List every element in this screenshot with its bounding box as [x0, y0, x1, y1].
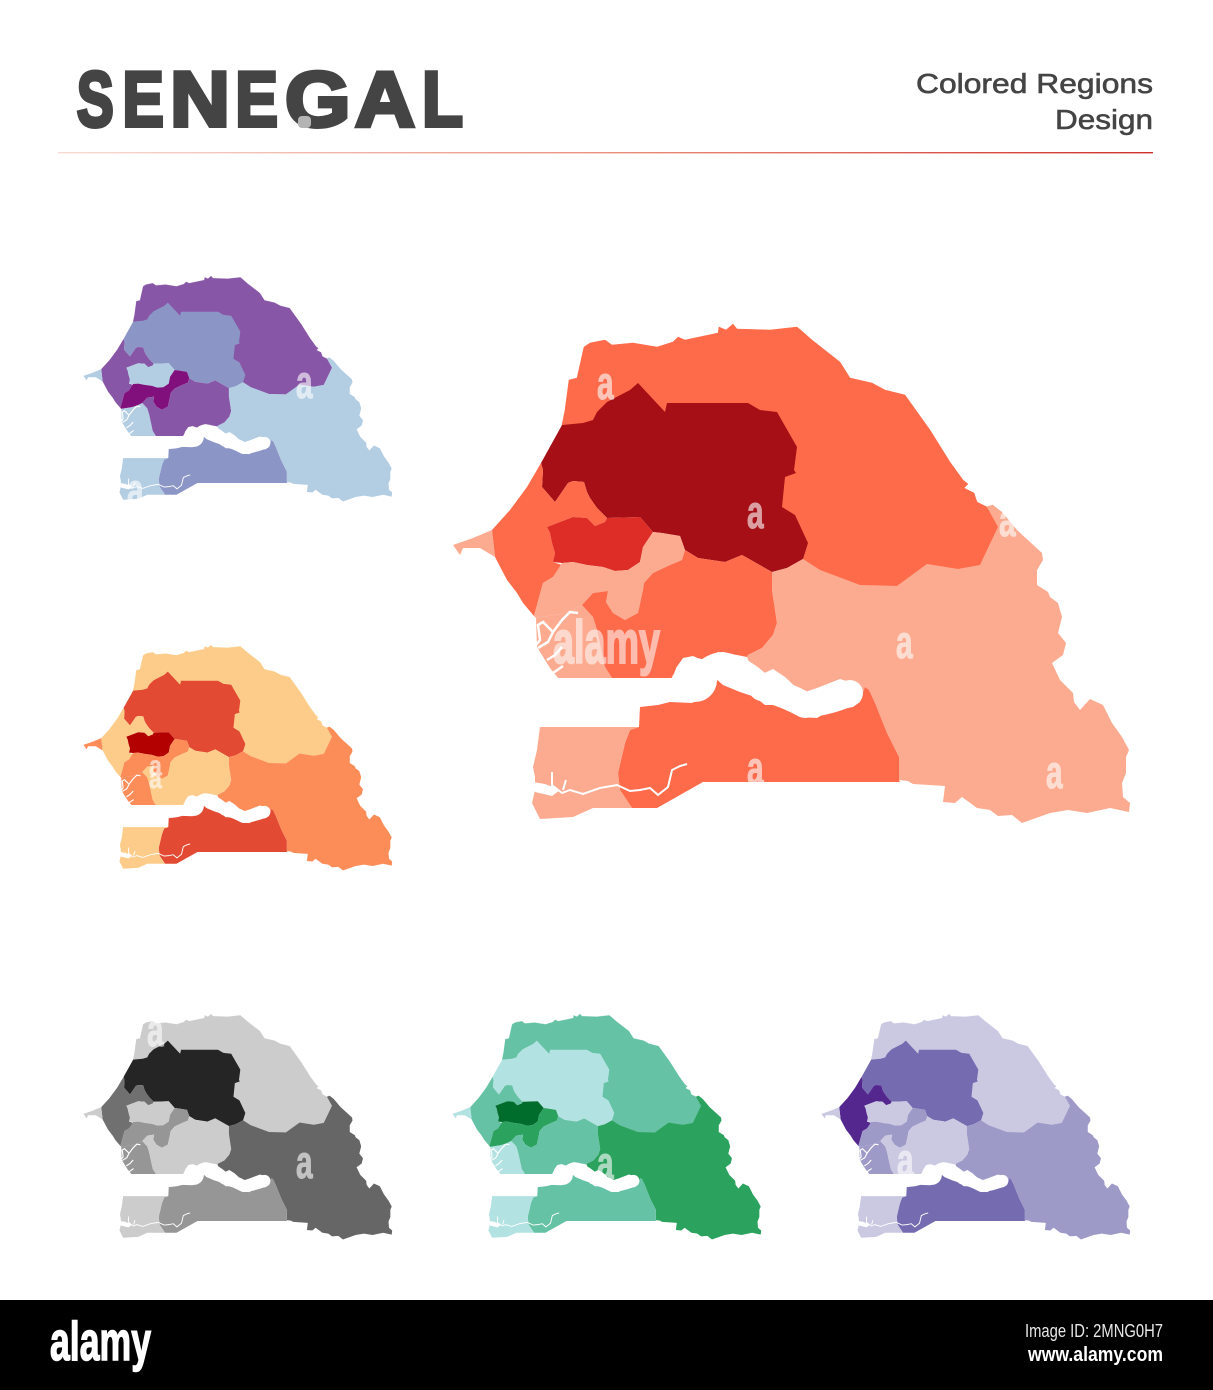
map: blue-purple version	[83, 276, 392, 502]
region: Kolda	[897, 1174, 1025, 1233]
region: Thies	[101, 1077, 154, 1146]
region: Kolda	[618, 678, 900, 808]
region: Fatick south	[121, 772, 156, 805]
region: Diourbel	[126, 363, 175, 388]
region: Fatick north	[120, 739, 189, 779]
region: Tambacounda	[218, 727, 392, 871]
watermark marks: a	[296, 1138, 313, 1189]
watermark marks: a	[1046, 748, 1063, 799]
rivers	[533, 612, 850, 796]
region: Fatick north	[534, 532, 685, 620]
region: Ziguinchor	[857, 1196, 906, 1238]
map: purple version	[821, 1014, 1130, 1240]
subtitle: Colored Regions	[916, 68, 1153, 99]
region: Louga	[124, 1041, 245, 1126]
region: Tambacounda	[218, 1096, 392, 1240]
region: Dakar	[83, 369, 103, 381]
region: Dakar	[821, 1107, 841, 1119]
watermark marks: a	[147, 1006, 164, 1057]
region: Louga	[541, 383, 808, 572]
region: Kolda	[159, 1174, 287, 1233]
region: Fatick north	[858, 1108, 927, 1148]
subtitle	[916, 68, 1153, 135]
title: G	[285, 55, 350, 143]
watermark marks: a	[897, 1136, 914, 1187]
footer image id: Image ID: 2MNG0H7	[1025, 1321, 1163, 1341]
watermark marks: a	[127, 466, 144, 517]
region: Kolda	[159, 436, 287, 495]
region: Kaolack	[142, 1116, 231, 1174]
region: north band	[133, 645, 332, 763]
region: Thies	[492, 463, 607, 616]
region: Thies	[470, 1077, 523, 1146]
region: Louga	[493, 1041, 614, 1126]
watermark marks: a	[296, 358, 313, 409]
map: grayscale version	[83, 1014, 392, 1240]
rivers	[120, 406, 264, 489]
watermark marks: a	[747, 744, 764, 795]
region: Fatick south	[859, 1141, 894, 1174]
region: Fatick south	[490, 1141, 525, 1174]
region: north band	[562, 324, 998, 586]
rivers	[120, 775, 264, 858]
region: Tambacounda	[587, 1096, 761, 1240]
region: Diourbel	[126, 732, 175, 757]
watermark: alamy wordmark: alamy	[553, 609, 660, 676]
region: Fatick north	[120, 1108, 189, 1148]
region: Fatick south	[121, 403, 156, 436]
region: Tambacounda	[218, 358, 392, 502]
watermark marks	[127, 358, 1063, 1190]
region: north band	[871, 1014, 1070, 1132]
region: Tambacounda	[956, 1096, 1130, 1240]
title: S	[77, 55, 114, 143]
region: Kaolack	[142, 378, 231, 436]
region: Fatick south	[121, 1141, 156, 1174]
footer logo: alamy	[50, 1310, 151, 1372]
title	[77, 55, 463, 143]
region: Ziguinchor	[119, 827, 168, 869]
rivers	[858, 1144, 1002, 1227]
region: Ziguinchor	[532, 727, 639, 819]
region: Ziguinchor	[119, 458, 168, 500]
title: L	[422, 55, 463, 143]
region: north band	[133, 1014, 332, 1132]
region: Ziguinchor	[119, 1196, 168, 1238]
region: Diourbel	[547, 517, 653, 571]
region: Tambacounda	[747, 505, 1130, 823]
watermark marks: a	[896, 618, 913, 669]
rivers	[120, 1144, 264, 1227]
region: Dakar	[453, 530, 495, 557]
subtitle: Design	[1055, 104, 1153, 135]
region: Kolda	[528, 1174, 656, 1233]
region: north band	[502, 1014, 701, 1132]
region: Fatick north	[489, 1108, 558, 1148]
region: Fatick north	[120, 370, 189, 410]
footer website: www.alamy.com	[1027, 1344, 1163, 1366]
region: Kolda	[159, 805, 287, 864]
region: Fatick south	[536, 605, 612, 678]
region: Thies	[101, 708, 154, 777]
region: north band	[133, 276, 332, 394]
watermark marks: a	[597, 1139, 614, 1190]
region: Thies	[839, 1077, 892, 1146]
region: Diourbel	[126, 1101, 175, 1126]
map: green version	[452, 1014, 761, 1240]
map: large red version	[453, 324, 1130, 823]
title: E	[235, 55, 278, 143]
title: E	[122, 55, 164, 143]
region: Dakar	[83, 738, 103, 750]
region: Dakar	[83, 1107, 103, 1119]
region: Kaolack	[142, 747, 231, 805]
footer bar	[0, 1300, 1213, 1390]
region: Diourbel	[495, 1101, 544, 1126]
region: Kaolack	[582, 550, 777, 678]
region: Ziguinchor	[488, 1196, 537, 1238]
title: A	[355, 55, 415, 143]
title: N	[170, 55, 230, 143]
watermark marks: a	[149, 751, 163, 782]
region: Louga	[862, 1041, 983, 1126]
region: Kaolack	[880, 1116, 969, 1174]
region: Kaolack	[511, 1116, 600, 1174]
region: Dakar	[452, 1107, 472, 1119]
watermark marks: a	[999, 496, 1016, 547]
watermark marks: a	[747, 488, 764, 539]
watermark marks: a	[149, 764, 163, 795]
region: Thies	[101, 339, 154, 408]
region: Diourbel	[864, 1101, 913, 1126]
rivers	[489, 1144, 633, 1227]
map: orange version	[83, 645, 392, 871]
region: Louga	[124, 303, 245, 388]
watermark spot on title	[298, 116, 311, 128]
region: Louga	[124, 672, 245, 757]
watermark marks: a	[597, 359, 614, 410]
